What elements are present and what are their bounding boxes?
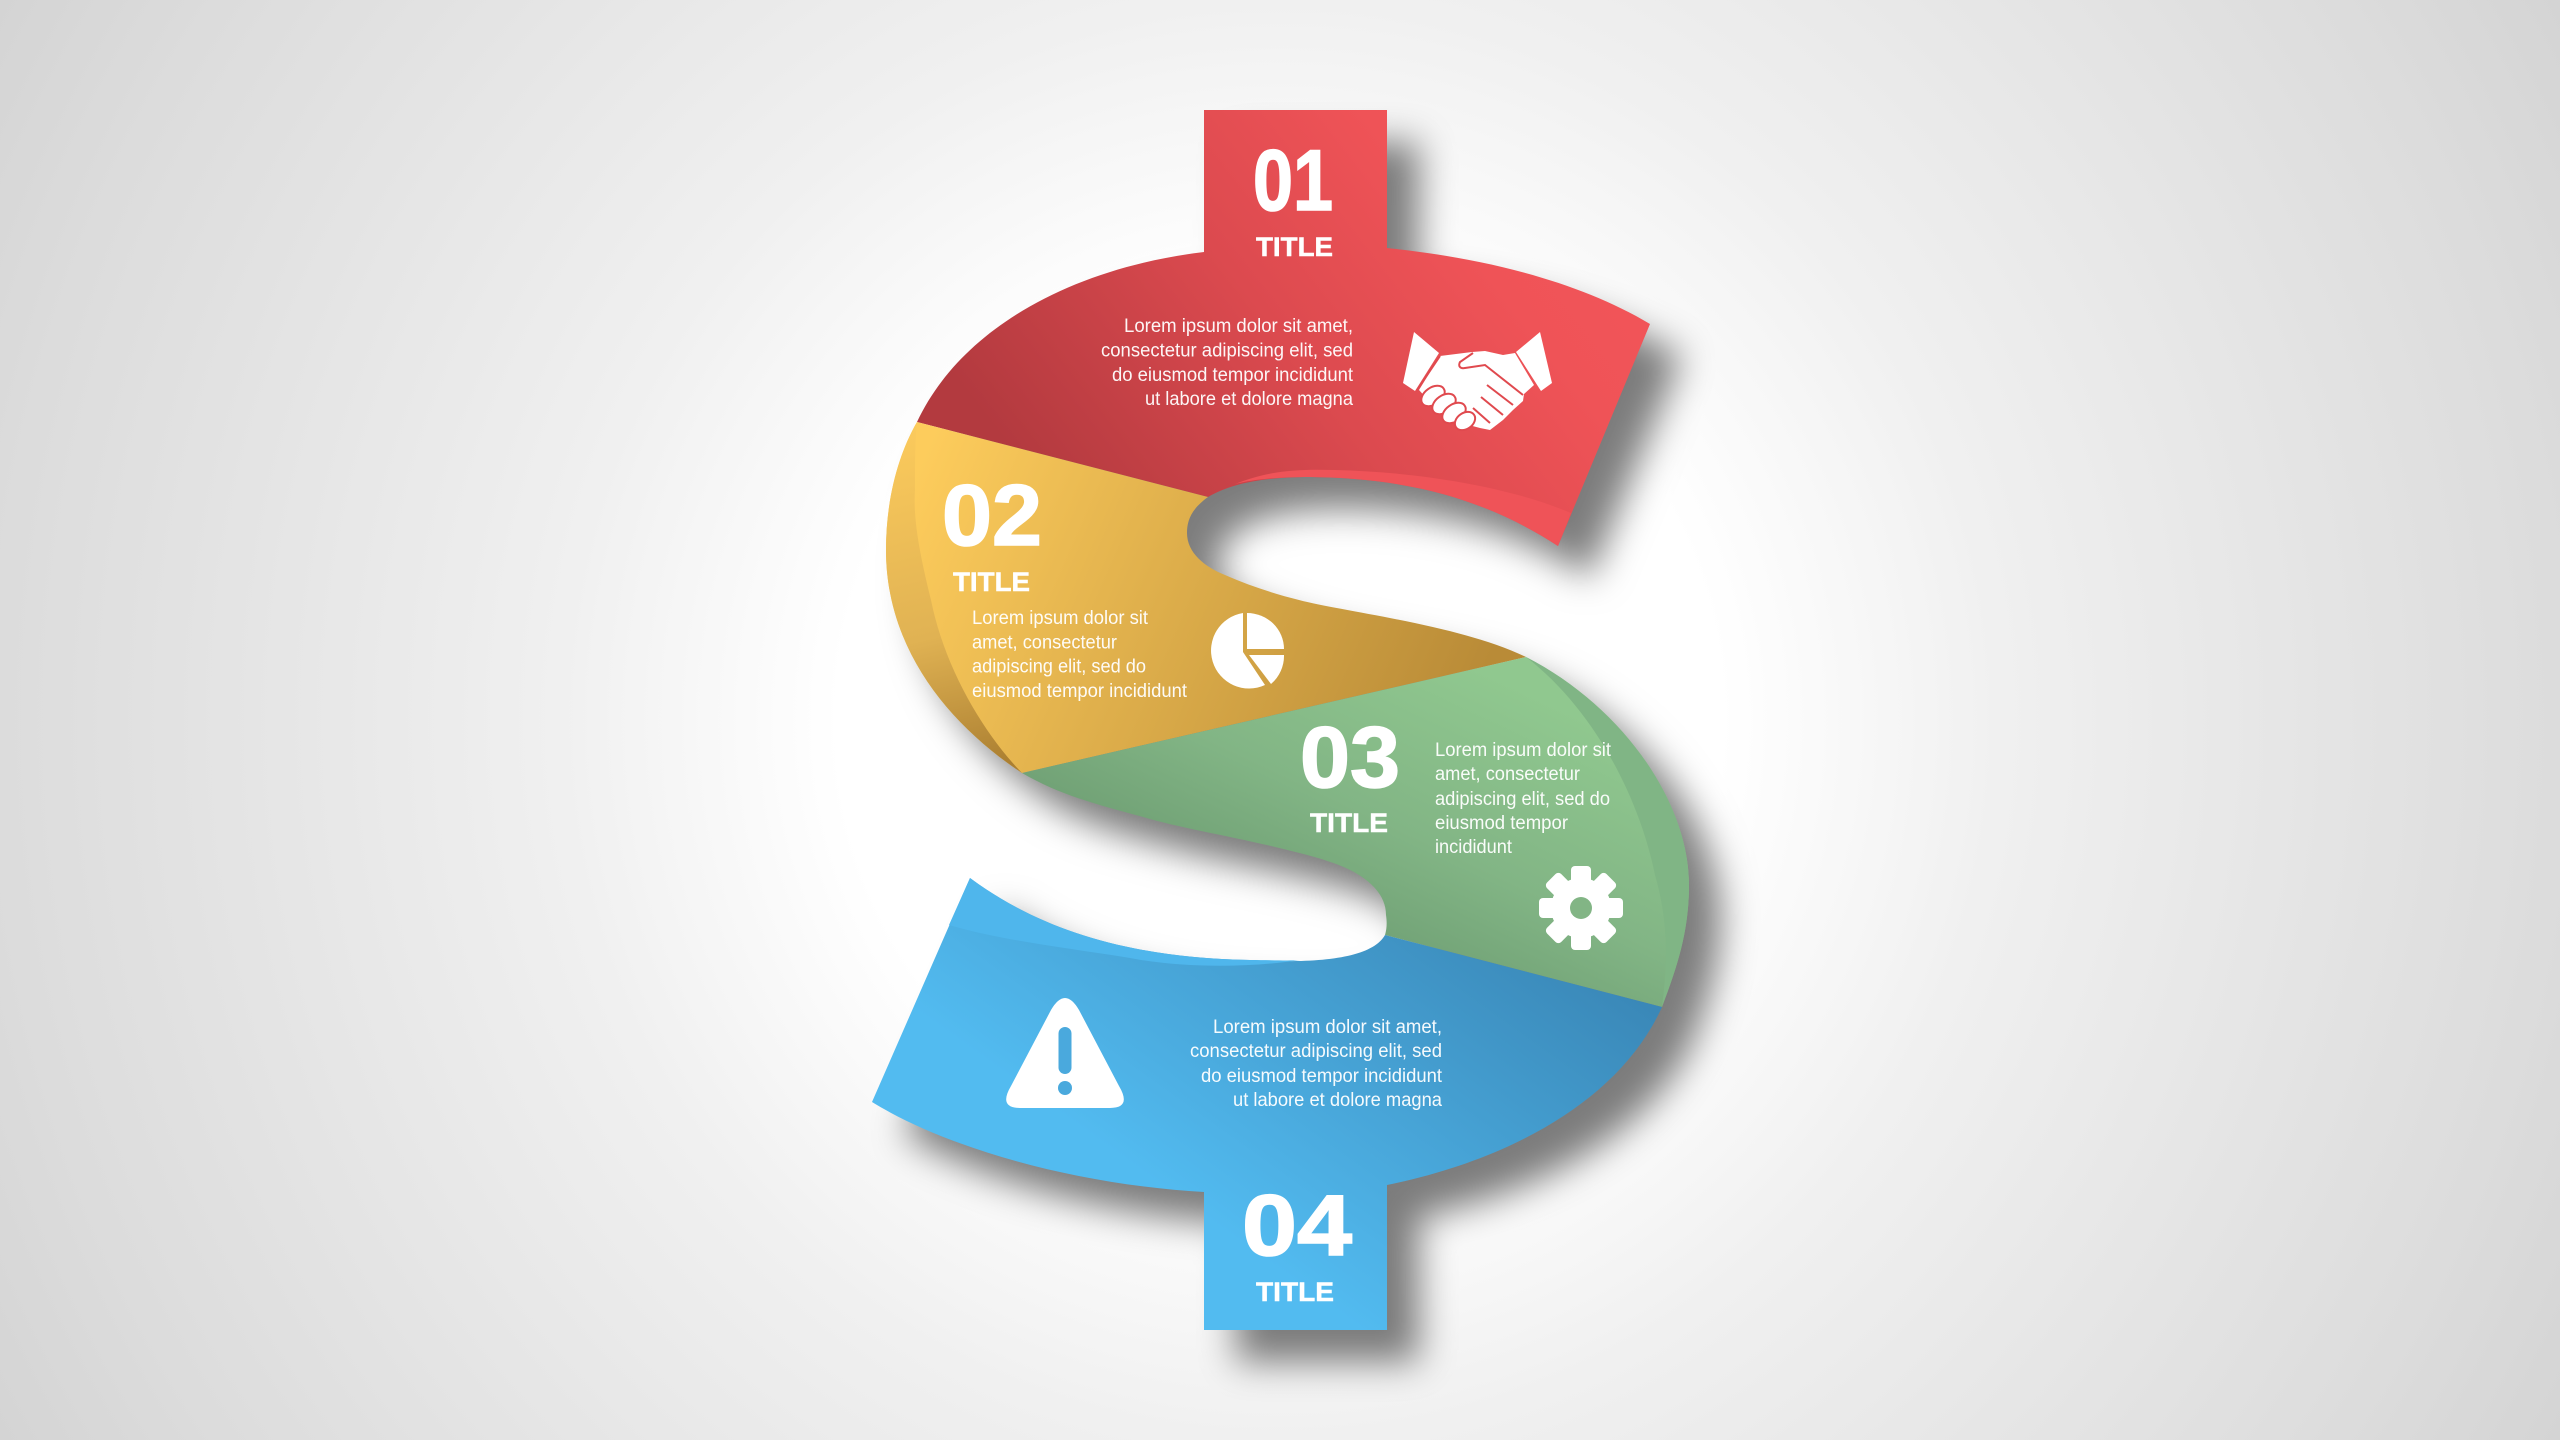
text block 04: do eiusmod tempor incididunt: [1201, 1066, 1443, 1087]
panel: 03 green: [1022, 657, 1689, 1007]
text block 01: [1101, 316, 1354, 410]
text block 01: Lorem ipsum dolor sit amet,: [1124, 316, 1353, 337]
number 02: 02: [942, 468, 1042, 564]
panel: 01 red: [917, 110, 1650, 546]
text block 02: eiusmod tempor incididunt: [972, 681, 1188, 702]
title 03: TITLE: [1310, 808, 1388, 838]
text block 02: [972, 608, 1188, 702]
text block 02: adipiscing elit, sed do: [972, 657, 1146, 678]
text block 02: amet, consectetur: [972, 632, 1118, 653]
number 03: 03: [1300, 710, 1400, 806]
text block 01: ut labore et dolore magna: [1145, 389, 1353, 410]
text block 04: Lorem ipsum dolor sit amet,: [1213, 1017, 1442, 1038]
panel: 04 blue: [872, 878, 1662, 1330]
text block 03: adipiscing elit, sed do: [1435, 789, 1610, 810]
title 04: TITLE: [1256, 1277, 1334, 1307]
text block 03: Lorem ipsum dolor sit: [1435, 740, 1612, 761]
icon: pie chart: [1211, 613, 1284, 689]
ribbon drop shadow: [872, 110, 1689, 1330]
text block 04: [1190, 1017, 1443, 1111]
icon: gear: [1539, 866, 1623, 950]
icon: handshake: [1403, 332, 1552, 434]
text block 03: amet, consectetur: [1435, 764, 1581, 785]
text block 03: eiusmod tempor: [1435, 813, 1569, 834]
title 02: TITLE: [953, 567, 1030, 597]
text block 02: Lorem ipsum dolor sit: [972, 608, 1149, 629]
text block 01: do eiusmod tempor incididunt: [1112, 365, 1354, 386]
number 04: 04: [1242, 1178, 1352, 1274]
number 01: 01: [1253, 133, 1333, 229]
icon: warning triangle: [1006, 998, 1124, 1108]
title 01: TITLE: [1256, 232, 1333, 262]
text block 04: consectetur adipiscing elit, sed: [1190, 1041, 1442, 1062]
text block 04: ut labore et dolore magna: [1233, 1090, 1442, 1111]
panel: 02 yellow: [886, 422, 1526, 773]
text block 01: consectetur adipiscing elit, sed: [1101, 340, 1353, 362]
text block 03: incididunt: [1435, 837, 1513, 858]
text block 03: [1435, 740, 1612, 858]
